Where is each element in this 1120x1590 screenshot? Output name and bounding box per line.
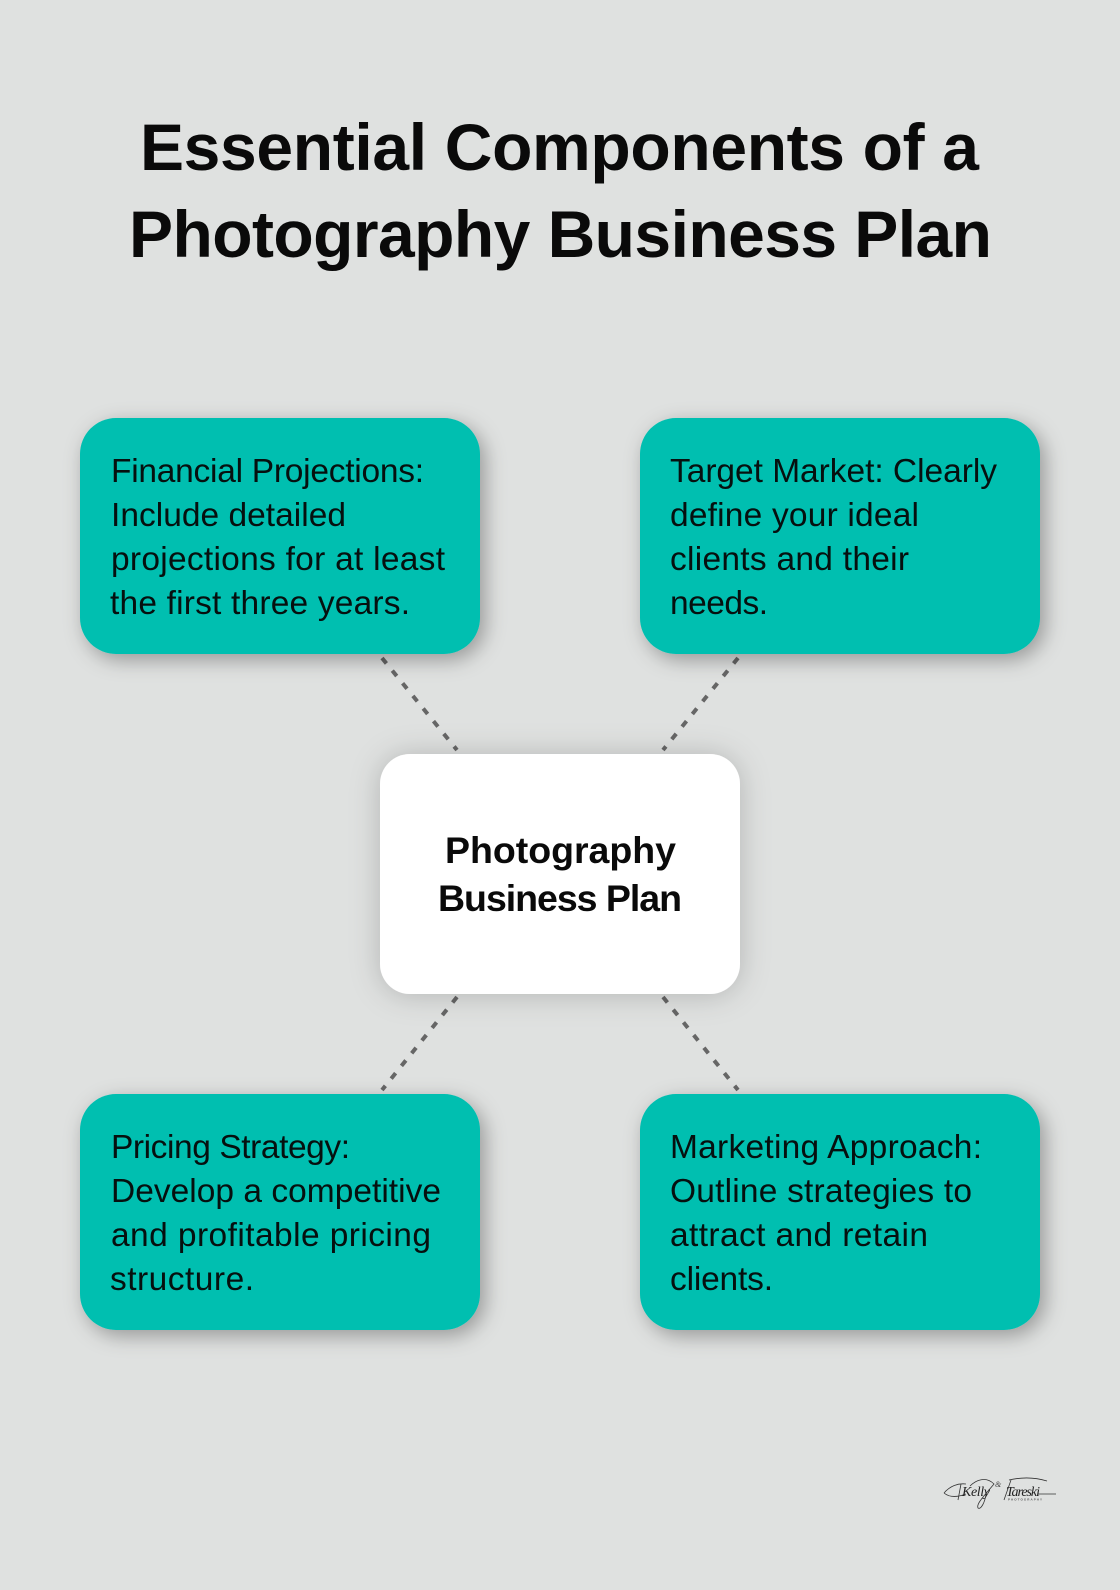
panel: pricing strategy: and profitable pricing [111, 1217, 431, 1254]
connector: financial projections to centre [382, 658, 457, 750]
panel: financial projections [80, 418, 480, 654]
connector: pricing strategy to centre [382, 997, 457, 1090]
panel: financial projections: projections for at least [111, 541, 446, 578]
panel: target market: needs. [670, 585, 768, 622]
logo: signature: & [995, 1480, 1002, 1489]
connector: marketing approach to centre [663, 997, 738, 1090]
panel: marketing approach: clients. [670, 1261, 773, 1298]
logo: signature [944, 1478, 1056, 1508]
logo: signature: Tareski [1006, 1485, 1040, 1500]
logo: signature: PHOTOGRAPHY [1008, 1498, 1042, 1502]
panel: target market: define your ideal [670, 497, 919, 534]
panel: target market: Target Market: Clearly [670, 453, 997, 490]
panel: pricing strategy [80, 1094, 480, 1330]
panel: marketing approach [640, 1094, 1040, 1330]
panel: target market: clients and their [670, 541, 909, 578]
panel: pricing strategy: Develop a competitive [111, 1173, 441, 1210]
title: Photography Business Plan [129, 197, 992, 271]
panel: pricing strategy: structure. [110, 1261, 254, 1298]
panel: pricing strategy: Pricing Strategy: [111, 1129, 350, 1166]
panel: marketing approach: attract and retain [670, 1217, 928, 1254]
title [129, 110, 992, 271]
title: Essential Components of a [140, 110, 980, 184]
connector: target market to centre [663, 658, 738, 750]
panel: marketing approach: Outline strategies to [670, 1173, 972, 1210]
logo: signature: Kelly [961, 1485, 991, 1500]
panel: financial projections: Include detailed [111, 497, 346, 534]
panel: marketing approach: Marketing Approach: [670, 1129, 982, 1166]
panel: target market [640, 418, 1040, 654]
panel: centre node: Photography [445, 829, 676, 871]
panel: financial projections: Financial Projections: [111, 453, 424, 490]
panel: centre node [380, 754, 740, 994]
panel: financial projections: the first three years. [110, 585, 410, 622]
panel: centre node: Business Plan [438, 877, 682, 919]
